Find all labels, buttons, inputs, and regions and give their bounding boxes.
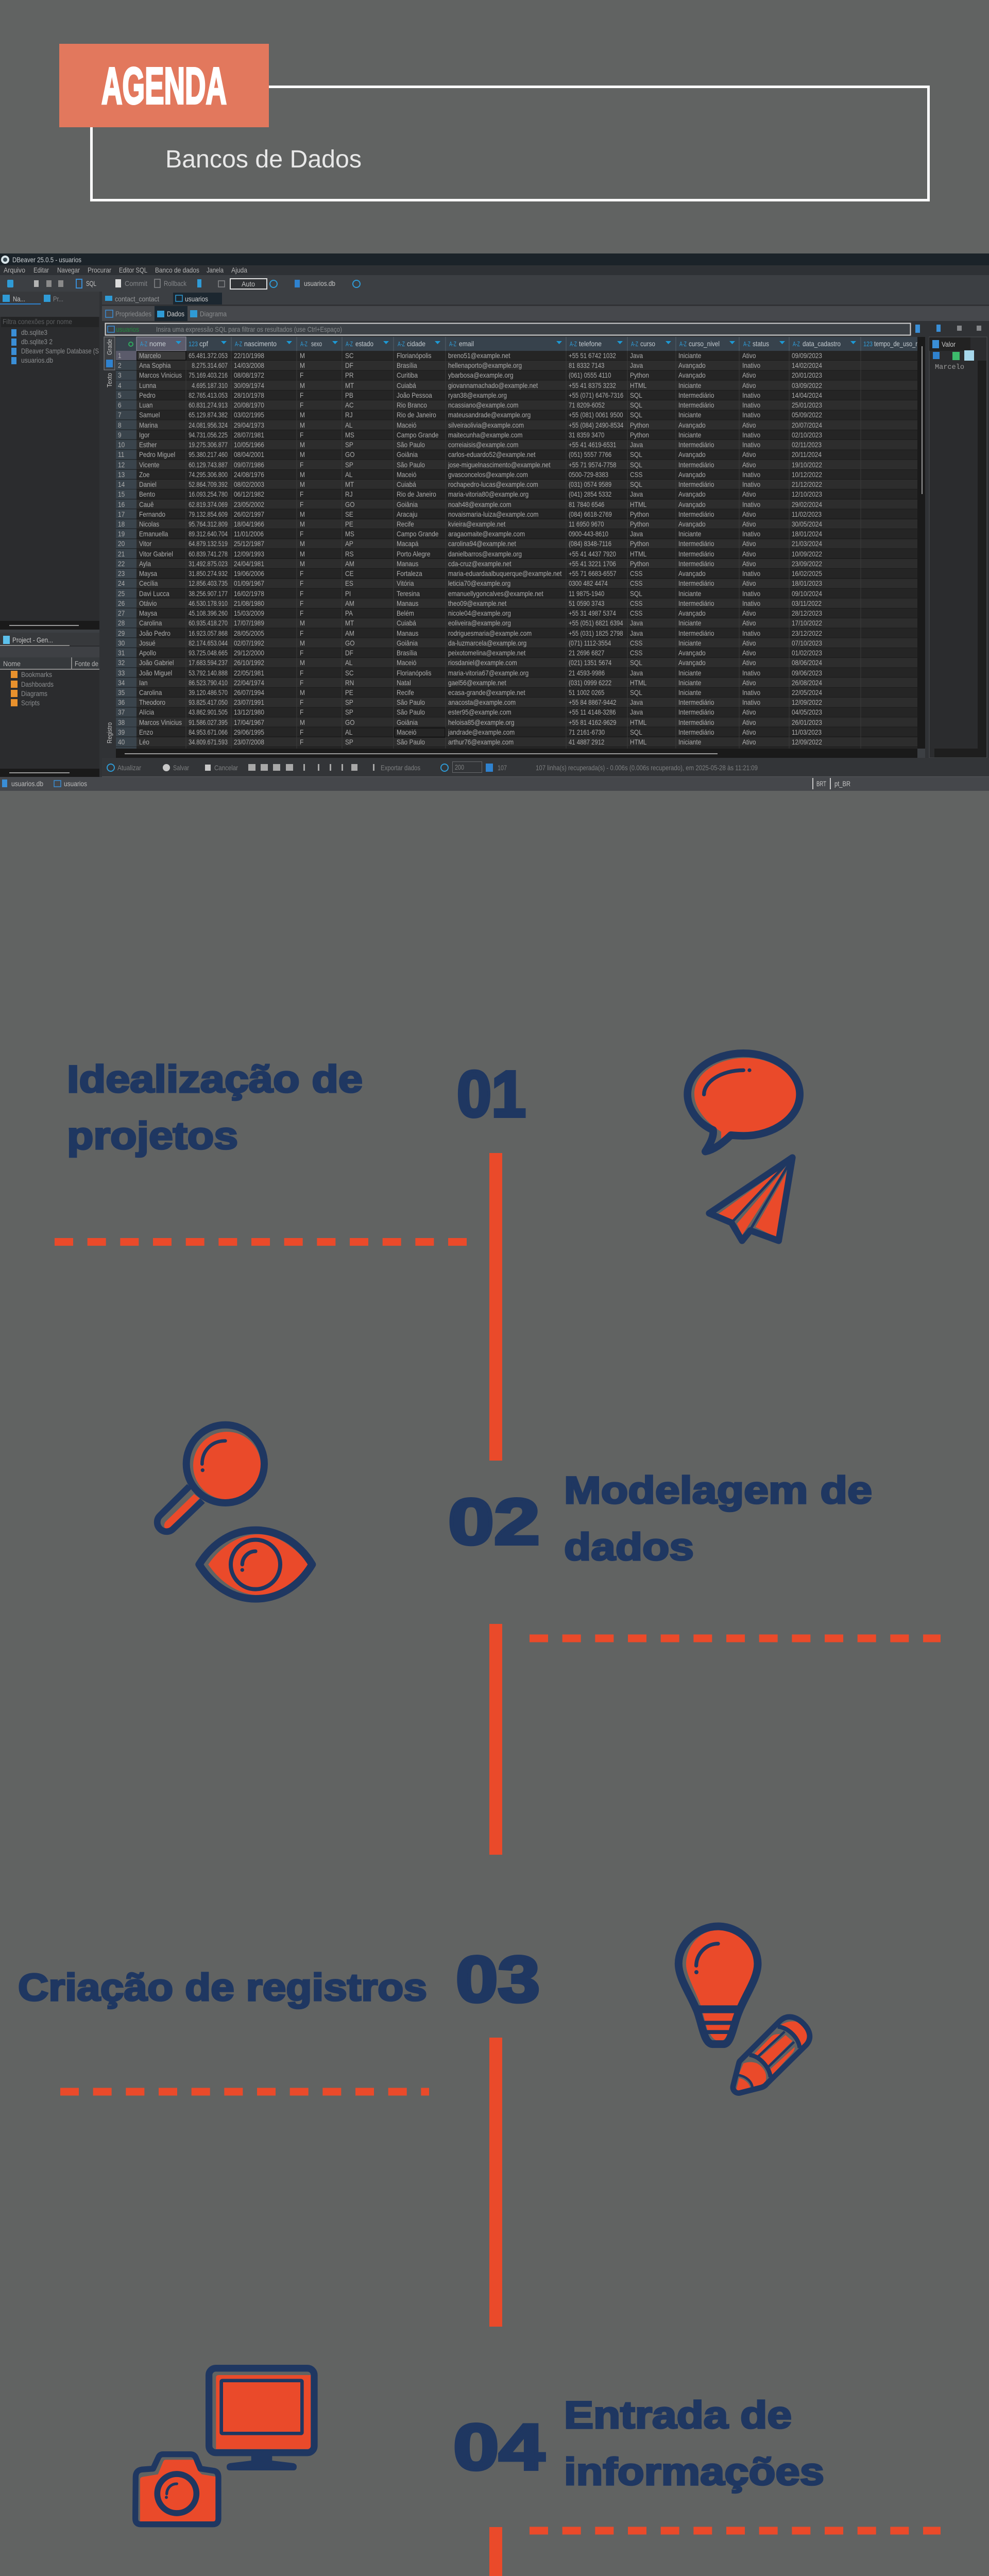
project panel: Nome	[3, 659, 21, 668]
results toolbar	[102, 758, 989, 777]
agenda tag: AGENDA	[101, 57, 227, 115]
table header: cidade	[407, 340, 425, 348]
navigator panel: db.sqlite3	[21, 328, 47, 336]
column: status: Ativo Inativo Ativo Ativo Inativo Inativo Inativo Ativo Inativo Inativo Ativo Ativo Inativo Inativo Ativo Inativo Ativo Ativo Inativo Ativo Ativo Ativo Inativo Ativo Inativo Inativo Ativo Ativo Inativo Ativo Ativo Ativo Inativo Ativo Inativo Inativo Ativo Ativo Ativo Ativo	[742, 351, 760, 746]
editor tabs	[102, 292, 989, 304]
side tabs	[102, 337, 116, 749]
navigator panel: usuarios.db	[21, 356, 53, 364]
sub tabs	[102, 306, 989, 321]
results toolbar: 107 linha(s) recuperada(s) - 0.006s (0.006s recuperado), em 2025-05-28 às 11:21:09	[536, 764, 758, 772]
table header: A-Z	[679, 340, 687, 348]
navigator panel: DBeaver Sample Database (S	[21, 347, 99, 355]
value panel: Marcelo	[935, 363, 964, 371]
table header: data_cadastro	[803, 340, 841, 348]
project panel: Diagrams	[21, 689, 47, 698]
sub tabs: Dados	[167, 310, 184, 318]
table header: estado	[355, 340, 373, 348]
navigator panel: Pr...	[53, 295, 63, 303]
results toolbar: Exportar dados	[381, 764, 420, 772]
number 01: 01	[457, 1058, 526, 1130]
column: curso: Java Java Python HTML SQL SQL SQL Python Python Java SQL SQL CSS SQL Java HTML Python Python Java Python HTML Python CSS CSS SQL CSS CSS Java Java CSS CSS SQL Java HTML SQL Java Java HTML SQL HTML	[630, 351, 649, 746]
project panel: Dashboards	[21, 680, 54, 688]
status bar: BRT	[816, 779, 826, 788]
table header: A-Z	[398, 340, 405, 348]
column: cpf: 65.481.372.053 8.275.314.607 75.169.403.216 4.695.187.310 82.765.413.053 60.831.274.913 65.129.874.382 24.081.956.324 94.731.056.225 19.275.306.877 95.380.217.460 60.129.743.887 74.295.306.800 52.864.709.392 16.093.254.780 62.819.374.069 79.132.854.609 95.764.312.809 89.312.640.704 64.879.132.519 60.839.741.278 31.492.875.023 31.850.274.932 12.856.403.735 38.256.907.177 46.530.178.910 45.108.396.260 60.935.418.270 16.923.057.868 82.174.653.044 93.725.048.665 17.683.594.237 53.792.140.888 86.523.790.410 39.120.486.570 93.825.417.050 43.862.901.505 91.586.027.395 84.953.671.066 34.809.671.593	[189, 351, 228, 746]
heading: Entrada de informações: Entrada de	[564, 2394, 792, 2436]
heading: Idealização de projetos: Idealização de	[67, 1058, 363, 1100]
icon: monitor	[209, 2368, 314, 2470]
table header: A-Z	[140, 340, 147, 348]
column: row numbers: 1 2 3 4 5 6 7 8 9 10 11 12 13 14 15 16 17 18 19 20 21 22 23 24 25 26 27 28 29 30 31 32 33 34 35 36 37 38 39 40	[118, 351, 125, 746]
icon: paper plane	[709, 1158, 792, 1241]
menu bar: Arquivo	[4, 266, 25, 274]
navigator panel: db.sqlite3 2	[21, 337, 53, 346]
table header: A-Z	[631, 340, 638, 348]
navigator panel: Na...	[13, 295, 25, 303]
column: estado: SC DF PR MT PB AC RJ AL MS SP GO SP AL MT RJ GO SE PE MS AP RS AM CE ES PI AM PA MT AM GO DF AL SC RN PE SP SP GO AL SP	[345, 351, 355, 746]
table header: A-Z	[346, 340, 353, 348]
column: curso_nivel: Iniciante Avançado Avançado Iniciante Intermediário Intermediário Iniciante Avançado Iniciante Intermediário Avançado Intermediário Avançado Intermediário Avançado Avançado Intermediário Avançado Iniciante Intermediário Intermediário Intermediário Avançado Intermediário Iniciante Intermediário Avançado Iniciante Intermediário Iniciante Avançado Avançado Iniciante Iniciante Iniciante Intermediário Intermediário Intermediário Intermediário Iniciante	[678, 351, 714, 746]
main toolbar: Auto	[242, 280, 255, 288]
table header: sexo	[311, 340, 322, 348]
table header: A-Z	[570, 340, 577, 348]
table header	[116, 337, 917, 351]
table row bands	[137, 351, 917, 749]
results toolbar: 107	[498, 764, 507, 772]
editor tabs: contact_contact	[115, 295, 159, 303]
column: data_cadastro: 09/09/2023 14/02/2024 20/01/2023 03/09/2022 14/04/2024 25/01/2023 05/09/2022 20/07/2024 02/10/2023 02/11/2023 20/11/2024 19/10/2022 10/12/2022 21/12/2022 12/10/2023 29/02/2024 11/02/2023 30/05/2024 18/01/2024 21/03/2024 10/09/2022 23/09/2022 16/02/2025 18/01/2023 09/10/2024 03/11/2022 28/12/2023 17/10/2022 23/12/2022 07/10/2023 01/02/2023 08/06/2024 09/06/2023 26/08/2024 22/05/2024 12/09/2022 04/05/2023 26/01/2023 11/03/2023 12/09/2022	[792, 351, 822, 746]
results toolbar: Salvar	[173, 764, 189, 772]
results toolbar: Cancelar	[214, 764, 238, 772]
SQL filter bar: Insira uma expressão SQL para filtrar os resultados (use Ctrl+Espaço)	[156, 325, 342, 333]
editor tabs: usuarios	[185, 295, 208, 303]
menu bar: Editor SQL	[119, 266, 147, 274]
value panel: Valor	[942, 340, 956, 348]
step 04	[135, 2368, 941, 2576]
project panel: Fonte de	[75, 659, 98, 668]
table header: 123	[863, 340, 873, 348]
main toolbar: Commit	[125, 279, 147, 287]
main toolbar	[0, 275, 989, 292]
table header: nome	[149, 340, 166, 348]
vertical bar	[489, 1153, 502, 1461]
icon: eye	[199, 1530, 312, 1599]
project panel: Scripts	[21, 699, 40, 707]
heading: Idealização de projetos	[67, 1058, 363, 1157]
column: cidade: Florianópolis Brasília Curitiba Cuiabá João Pessoa Rio Branco Rio de Janeiro Maceió Campo Grande São Paulo Goiânia São Paulo Maceió Cuiabá Rio de Janeiro Goiânia Aracaju Recife Campo Grande Macapá Porto Alegre Manaus Fortaleza Vitória Teresina Manaus Belém Cuiabá Manaus Goiânia Brasília Maceió Florianópolis Natal Recife São Paulo São Paulo Goiânia Maceió São Paulo	[397, 351, 438, 746]
table header: 123	[189, 340, 198, 348]
table header: nascimento	[244, 340, 277, 348]
dashed connector	[60, 2088, 429, 2096]
side tabs: Registro	[106, 722, 113, 743]
status bar	[0, 777, 989, 791]
number 03: 03	[456, 1943, 540, 2015]
project panel: Project - Gen...	[12, 636, 53, 644]
agenda tag	[59, 44, 269, 127]
project panel	[0, 630, 99, 777]
menu bar: Editar	[33, 266, 49, 274]
column: telefone: +55 51 6742 1032 81 8332 7143 (061) 0555 4110 +55 41 8375 3232 +55 (071) 6476-7316 71 8209-6052 +55 (081) 0061 9500 +55 (084) 2490-8534 31 8359 3470 +55 41 4619-6531 (051) 5557 7766 +55 71 9574-7758 0500-729-8383 (031) 0574 9589 (041) 2854 5332 81 7840 6546 (084) 6618-2769 11 6950 9670 0900-443-8610 (084) 8348-7116 +55 41 4437 7920 +55 41 3221 1706 +55 71 6683-6557 0300 482 4474 11 9875-1940 51 0590 3743 +55 31 4987 5374 +55 (051) 6821 6394 +55 (031) 1825 2798 (071) 1112-3554 21 2696 6827 (021) 1351 5674 21 4593-9986 (031) 0999 6222 51 1002 0265 +55 84 8867-9442 +55 11 4148-3286 +55 81 4162-9629 71 2161-6730 41 4887 2912	[569, 351, 623, 746]
application chrome	[0, 253, 989, 791]
menu bar: Banco de dados	[155, 266, 199, 274]
dashed connector	[530, 2527, 941, 2535]
main toolbar: Rollback	[164, 279, 187, 287]
sub tabs: Propriedades	[115, 310, 151, 318]
number 02: 02	[448, 1485, 540, 1558]
dashed connector	[530, 1634, 941, 1642]
title bar: DBeaver 25.0.5 - usuarios	[12, 256, 81, 264]
icon: light bulb	[678, 1926, 758, 2044]
scrollbars	[116, 337, 925, 758]
vertical bar	[489, 1624, 502, 1855]
heading: Modelagem de dados	[564, 1469, 872, 1568]
project panel: Bookmarks	[21, 670, 52, 679]
table header: cpf	[199, 340, 208, 348]
timeline	[18, 1049, 941, 2576]
step 01	[55, 1053, 800, 1461]
header block	[59, 44, 930, 201]
results toolbar: 200	[455, 763, 464, 771]
icon: speech bubble	[688, 1053, 800, 1151]
heading: Entrada de informações	[564, 2394, 824, 2493]
icon: camera	[135, 2454, 218, 2524]
dashed connector	[55, 1238, 467, 1246]
white frame	[92, 87, 928, 200]
column grid lines and selected cells	[116, 351, 861, 749]
number 04: 04	[453, 2411, 544, 2483]
column: sexo: M M F M F F M M F M M F M M F F M M F M M M F F F F F M F M F M F F M F F M F F	[300, 351, 305, 746]
vertical bar	[489, 2527, 502, 2576]
sub tabs: Diagrama	[200, 310, 227, 318]
navigator panel	[0, 292, 99, 769]
side tabs: Grade	[106, 339, 113, 355]
icon: magnifying glass	[157, 1425, 264, 1532]
table header: tempo_de_uso_r	[874, 340, 917, 348]
table header: email	[459, 340, 474, 348]
column: nome: Marcelo Ana Sophia Marcos Vinicius Lunna Pedro Luan Samuel Marina Igor Esther Pedro Miguel Vicente Zoe Daniel Bento Cauê Fernando Nicolas Emanuella Vitor Vitor Gabriel Ayla Maysa Cecília Davi Lucca Otávio Maysa Carolina João Pedro Josué Apollo João Gabriel João Miguel Ian Carolina Theodoro Alícia Marcos Vinicius Enzo Léo	[139, 351, 182, 746]
table header: A-Z	[793, 340, 800, 348]
status bar: usuarios.db	[11, 779, 43, 788]
heading: Modelagem de dados: Modelagem de	[564, 1469, 872, 1512]
table header: curso	[640, 340, 655, 348]
main toolbar: SQL	[86, 279, 96, 287]
step 03	[18, 1926, 810, 2327]
status bar: usuarios	[64, 779, 87, 788]
table header: A-Z	[235, 340, 242, 348]
SQL filter bar: usuarios	[116, 325, 139, 333]
column: email: breno51@example.net hellenaporto@example.org ybarbosa@example.org giovannamachado@example.net ryan38@example.org ncassiano@example.com mateusandrade@example.org silveiraolivia@example.com maitecunha@example.com correiaisis@example.com carlos-eduardo52@example.net jose-miguelnascimento@example.net gvasconcelos@example.com rochapedro-lucas@example.com maria-vitoria80@example.org noah48@example.com novaismaria-luiza@example.com kvieira@example.net aragaomaite@example.com carolina94@example.net danielbarros@example.org cda-cruz@example.net maria-eduardaalbuquerque@example.net leticia70@example.org emanuellygoncalves@example.net theo09@example.net nicole04@example.org eoliveira@example.org rodriguesmaria@example.com da-luzmarcela@example.org peixotomelina@example.net riosdaniel@example.com maria-vitoria67@example.org gael56@example.net ecasa-grande@example.net anacosta@example.com ester95@example.com heloisa85@example.org jandrade@example.com arthur76@example.com	[448, 351, 561, 746]
heading: Modelagem de dados: dados	[564, 1526, 694, 1568]
table header: telefone	[579, 340, 602, 348]
status bar: pt_BR	[834, 779, 850, 788]
subtitle: Bancos de Dados	[165, 146, 362, 173]
step 02	[157, 1425, 941, 1855]
table header: curso_nivel	[689, 340, 720, 348]
menu bar: Ajuda	[231, 266, 247, 274]
menu bar: Procurar	[88, 266, 111, 274]
SQL filter bar	[105, 324, 981, 335]
results toolbar: Atualizar	[117, 764, 141, 772]
heading: Entrada de informações: informações	[564, 2450, 824, 2493]
table header: A-Z	[743, 340, 751, 348]
menu bar	[0, 265, 989, 275]
table header: status	[753, 340, 769, 348]
title bar	[0, 253, 989, 265]
heading: Idealização de projetos: projetos	[67, 1114, 238, 1157]
navigator panel: Filtra conexões por nome	[3, 317, 72, 326]
value panel	[929, 337, 987, 758]
side tabs: Texto	[106, 373, 113, 387]
row number column	[116, 351, 137, 749]
main toolbar: usuarios.db	[304, 279, 335, 287]
column: nascimento: 22/10/1998 14/03/2008 08/08/1972 30/09/1974 28/10/1978 20/08/1970 03/02/1995 29/04/1973 28/07/1981 10/05/1966 08/04/2001 09/07/1986 24/08/1976 08/02/2003 06/12/1982 23/05/2002 26/02/1997 18/04/1966 11/01/2006 25/12/1987 12/09/1993 24/04/1981 19/06/2006 01/09/1967 16/02/1978 21/08/1980 15/03/2009 17/07/1989 28/05/2005 02/07/1992 29/12/2000 26/10/1992 22/05/1981 22/04/1974 26/07/1994 23/07/1991 13/12/1980 17/04/1967 29/06/1995 23/07/2008	[234, 351, 264, 746]
icon: pencil	[733, 2017, 810, 2093]
menu bar: Janela	[207, 266, 224, 274]
menu bar: Navegar	[57, 266, 80, 274]
heading: Criação de registros: Criação de registros	[18, 1966, 427, 2009]
panel: DBeaver screenshot	[0, 253, 989, 791]
table header: A-Z	[300, 340, 308, 348]
vertical bar	[489, 2038, 502, 2327]
table header: A-Z	[449, 340, 456, 348]
